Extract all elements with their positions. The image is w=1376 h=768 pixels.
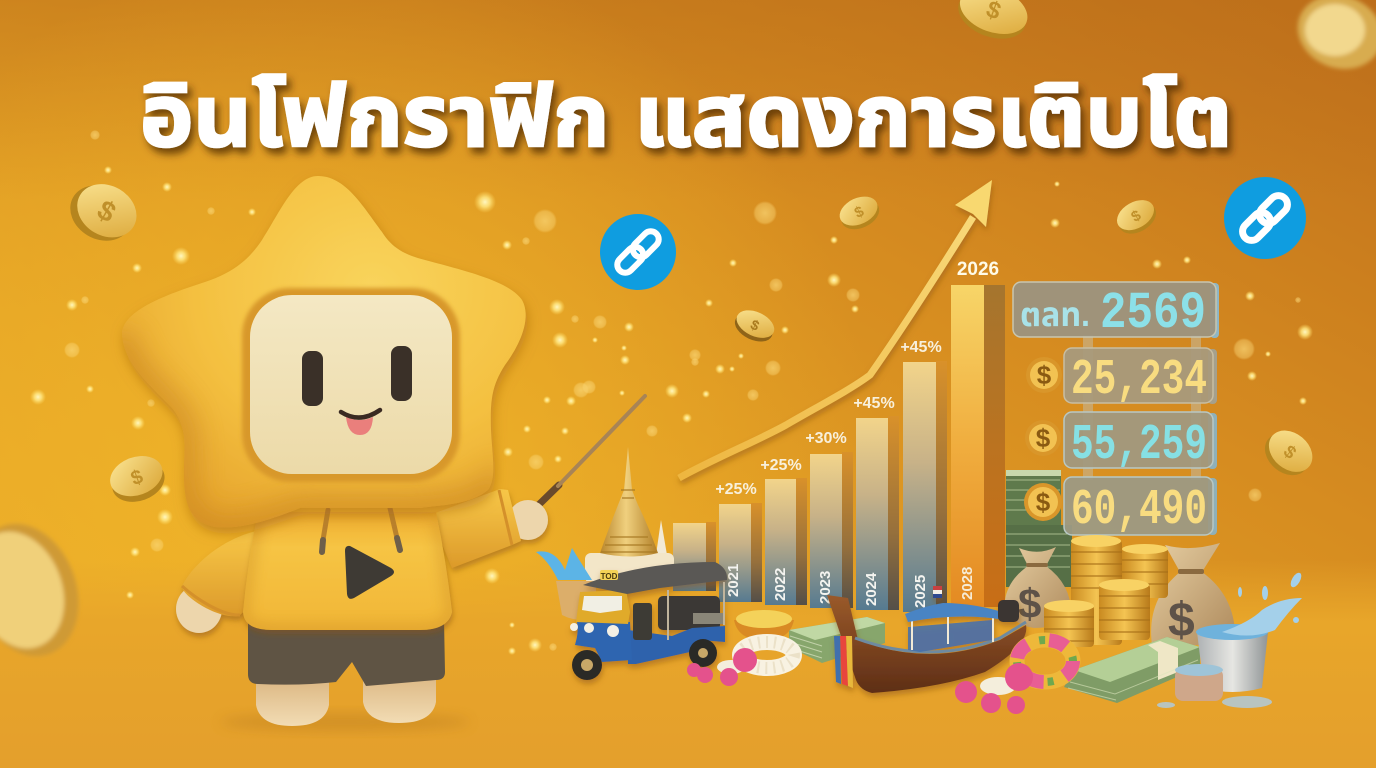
water puddle xyxy=(1157,696,1272,708)
money bag: right: $ xyxy=(1168,594,1195,647)
panel: value 55,259: 55,259 xyxy=(1071,417,1207,474)
panel: market year: 2569 xyxy=(1100,284,1206,343)
coin icons xyxy=(1024,357,1062,521)
floating coin: lower left xyxy=(104,449,170,509)
bar: 2024 xyxy=(856,416,899,610)
water bucket xyxy=(1196,571,1303,692)
bar: 2026 xyxy=(951,285,1005,607)
floating coin: upper left: $ xyxy=(92,194,121,229)
bar: 2021 xyxy=(719,503,762,602)
money bag: right xyxy=(1151,543,1235,647)
board posts xyxy=(1083,335,1201,480)
icon: link badge left xyxy=(600,214,676,290)
rear body xyxy=(628,626,725,664)
flower garland small xyxy=(687,648,757,686)
growth arrow xyxy=(679,180,992,478)
floating coin: lower left: $ xyxy=(128,466,146,490)
growth labels: +45% xyxy=(853,395,895,412)
left arm xyxy=(176,530,265,633)
panel: value 60,490: 60,490 xyxy=(1071,482,1207,539)
blurred foreground coin: left xyxy=(0,509,96,671)
panel: market year xyxy=(1013,282,1219,343)
play icon xyxy=(345,546,394,599)
growth labels: +30% xyxy=(805,430,847,447)
coin icons: $ xyxy=(1036,487,1051,517)
bowl of gold xyxy=(734,610,794,641)
floating coin: top xyxy=(952,0,1034,47)
growth labels: +45% xyxy=(900,339,942,356)
money bag: left xyxy=(1005,547,1071,628)
growth labels: 2026 xyxy=(957,259,999,280)
chedi pagoda xyxy=(585,447,674,583)
growth bar chart xyxy=(673,259,1005,612)
floating coin: upper left xyxy=(60,171,146,253)
bar: 2023: 2023 xyxy=(817,571,834,604)
cash bundle: middle xyxy=(789,617,885,663)
panel: value 25,234: 25,234 xyxy=(1071,352,1207,409)
right arm xyxy=(430,489,548,568)
growth labels: +25% xyxy=(715,481,757,498)
legs xyxy=(256,676,436,726)
taxi sign: TOD xyxy=(601,572,618,581)
hull rim xyxy=(855,622,1026,652)
bar: 2024: 2024 xyxy=(863,572,880,606)
floating coin: centre 2 xyxy=(731,305,779,347)
flag xyxy=(933,586,942,598)
water splash xyxy=(1222,571,1303,636)
boat hull xyxy=(827,595,1026,693)
rear seat xyxy=(658,596,723,630)
cash stack: behind panels xyxy=(1006,470,1072,587)
coin icons: $ xyxy=(1037,360,1052,390)
tuk tuk xyxy=(570,562,727,680)
boat motor xyxy=(998,600,1019,622)
wheels xyxy=(572,639,717,680)
face xyxy=(242,288,460,482)
bar: 2022: 2022 xyxy=(772,568,789,601)
pointer stick xyxy=(519,396,645,524)
growth labels xyxy=(715,259,999,498)
hoodie xyxy=(243,512,452,630)
sparkle particles xyxy=(30,130,1313,655)
star head xyxy=(122,176,526,540)
front body xyxy=(575,622,632,662)
bar: 2026: 2028 xyxy=(959,567,976,600)
bar: 2021: 2021 xyxy=(725,564,742,597)
title: อินโฟกราฟิก แสดงการเติบโต xyxy=(140,69,1232,165)
head edge shading xyxy=(122,332,500,540)
floating coin: centre 1: $ xyxy=(852,203,867,222)
floating coin: right 2: $ xyxy=(1280,441,1300,463)
roof posts xyxy=(668,582,724,640)
boat canopy xyxy=(905,603,1009,622)
blurred foreground coin: top right xyxy=(1287,0,1376,81)
mouth xyxy=(341,410,380,435)
flower wreath xyxy=(1017,640,1073,682)
drawstrings xyxy=(322,508,400,552)
flower garland large xyxy=(955,663,1033,714)
cash bundle: front xyxy=(1064,637,1200,703)
growth labels: +25% xyxy=(760,457,802,474)
floating coin: right 2 xyxy=(1257,421,1321,484)
coin stacks xyxy=(1044,535,1168,647)
water bowl with splash xyxy=(536,548,596,620)
headlights xyxy=(570,623,619,637)
long tail boat xyxy=(827,586,1026,693)
windshield xyxy=(576,590,630,624)
mascot: star character with pointer xyxy=(122,176,645,731)
bar: 2023 xyxy=(810,452,853,608)
money bag: left: $ xyxy=(1018,580,1041,627)
bar: 2022 xyxy=(765,478,807,605)
door post xyxy=(633,603,652,640)
icon: link badge right xyxy=(1224,177,1306,259)
floating coin: centre 1 xyxy=(835,191,884,235)
shorts xyxy=(248,620,445,686)
small white spire xyxy=(656,520,667,555)
jasmine garland xyxy=(740,642,794,668)
bar: base xyxy=(673,522,716,591)
coin icons: $ xyxy=(1036,423,1051,453)
boat cabin xyxy=(908,606,993,652)
silver cup xyxy=(1175,664,1223,701)
digital display board xyxy=(1013,282,1219,539)
mascot shadow xyxy=(220,713,470,731)
panel: market year: ตลท. xyxy=(1020,296,1090,334)
boat ribbons xyxy=(834,636,853,688)
floating coin: right 1: $ xyxy=(1128,207,1145,226)
tuk tuk roof xyxy=(583,562,727,594)
floating coin: centre 2: $ xyxy=(748,316,762,334)
floating coin: right 1 xyxy=(1112,194,1161,240)
bar: 2025 xyxy=(903,361,947,612)
bar: 2025: 2025 xyxy=(912,575,929,608)
eyes xyxy=(302,346,412,406)
